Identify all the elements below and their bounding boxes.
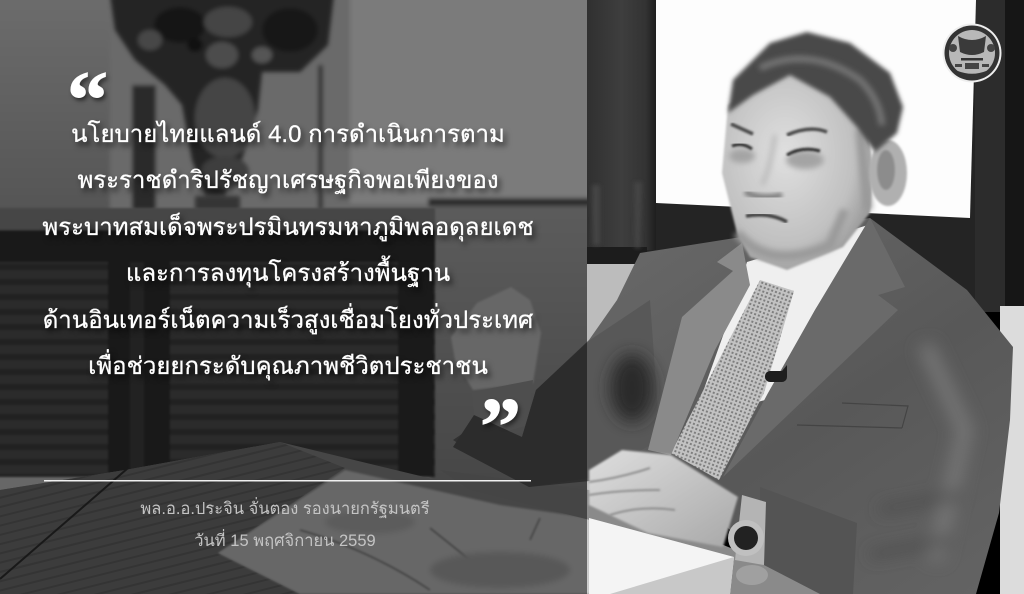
desk front right and notebook base	[440, 470, 860, 594]
dark translucent overlay panel	[0, 0, 587, 594]
quote text	[42, 120, 538, 382]
brows	[731, 124, 827, 135]
ear	[869, 140, 907, 206]
man figure	[451, 32, 1013, 594]
quote text: นโยบายไทยแลนด์ 4.0 การดำเนินการตาม	[71, 121, 505, 148]
jacket body	[453, 218, 1013, 594]
finger lines	[589, 468, 675, 515]
nose	[745, 192, 782, 197]
eyes	[732, 145, 820, 155]
window frame right side	[587, 0, 1024, 594]
microphone	[765, 365, 787, 382]
bright window	[656, 0, 976, 218]
left interior wall	[0, 0, 590, 594]
shirt	[693, 225, 868, 420]
radiator cabinet	[0, 208, 435, 477]
raised arm sleeve	[453, 300, 660, 487]
quote text: เพื่อช่วยยกระดับคุณภาพชีวิตประชาชน	[88, 353, 488, 380]
sleeve folds	[870, 345, 965, 560]
writing hand	[589, 450, 738, 547]
attribution	[140, 497, 430, 550]
notebook	[589, 518, 734, 594]
face	[722, 70, 873, 270]
divider rule	[44, 480, 531, 482]
window handles	[592, 182, 642, 248]
desk surface	[0, 442, 590, 594]
hair	[728, 32, 903, 152]
attribution: พล.อ.อ.ประจิน จั่นตอง รองนายกรัฐมนตรี	[140, 500, 430, 518]
quote text: พระราชดำริปรัชญาเศรษฐกิจพอเพียงของ	[77, 167, 499, 194]
watch	[728, 495, 768, 585]
breast pocket	[797, 403, 908, 428]
shirt cuff	[472, 380, 533, 435]
mouth	[746, 215, 787, 222]
closing quote mark: ”	[480, 381, 521, 472]
dark shadow under lapel	[610, 354, 654, 422]
emblem seal	[942, 24, 1002, 82]
lower sleeve	[760, 487, 857, 594]
quote text: ด้านอินเทอร์เน็ตความเร็วสูงเชื่อมโยงทั่วประเทศ	[43, 307, 533, 334]
tie	[671, 280, 794, 480]
left lapel	[648, 243, 750, 455]
hair highlight	[760, 59, 882, 125]
raised hand	[451, 287, 541, 390]
quote text: พระบาทสมเด็จพระปรมินทรมหาภูมิพลอดุลยเดช	[42, 214, 534, 241]
flower vase	[110, 0, 334, 210]
map paper on desk	[218, 470, 590, 594]
opening quote mark: “	[67, 54, 108, 145]
attribution: วันที่ 15 พฤศจิกายน 2559	[194, 532, 376, 550]
right lapel	[723, 218, 905, 477]
notebook spiral	[610, 557, 734, 594]
wall details	[0, 0, 600, 524]
face shading	[729, 130, 868, 256]
quote text: และการลงทุนโครงสร้างพื้นฐาน	[126, 260, 450, 287]
